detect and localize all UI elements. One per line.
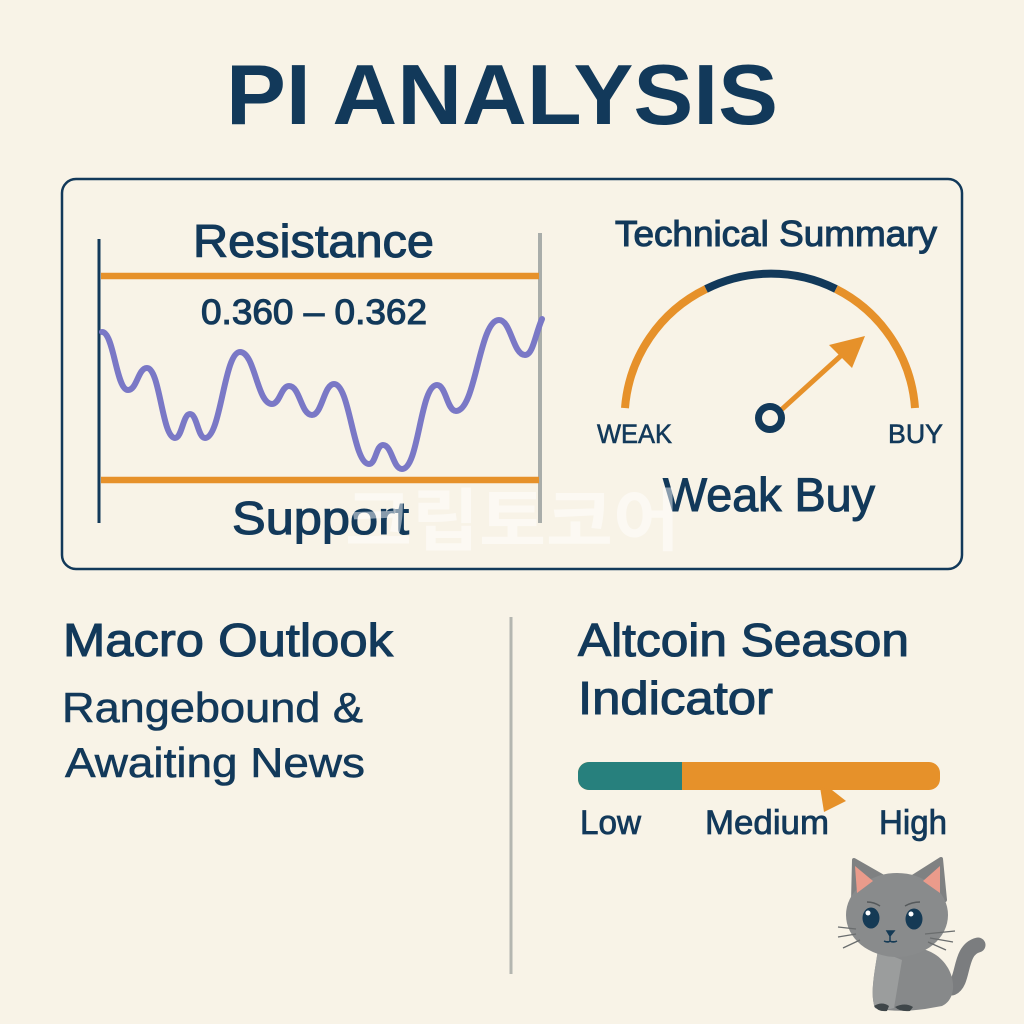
bar label: high: High	[879, 804, 947, 842]
gauge	[625, 274, 915, 430]
bar label: low: Low	[580, 804, 641, 842]
gauge label: buy: BUY	[888, 419, 943, 449]
panel: price and technical summary	[62, 179, 962, 569]
altcoin season heading: Altcoin Season	[578, 614, 909, 666]
gauge result: Weak Buy	[663, 468, 875, 521]
watermark: 크립토코어	[345, 484, 680, 560]
bar label: medium: Medium	[705, 804, 829, 842]
technical summary heading: Technical Summary	[615, 213, 937, 254]
altcoin season bar	[578, 762, 940, 812]
icon: gray kitten	[838, 859, 978, 1011]
altcoin season heading	[578, 614, 909, 724]
macro outlook text: Rangebound &	[62, 684, 363, 731]
support label: Support	[232, 492, 409, 544]
price range chart	[99, 233, 542, 523]
gauge label: weak: WEAK	[597, 419, 672, 449]
altcoin season heading: Indicator	[578, 672, 773, 724]
resistance range value: 0.360 – 0.362	[201, 293, 427, 332]
macro outlook text	[62, 684, 365, 786]
resistance label: Resistance	[193, 215, 434, 267]
macro outlook text: Awaiting News	[65, 739, 365, 786]
title: PI ANALYSIS	[226, 48, 778, 143]
macro outlook heading: Macro Outlook	[63, 614, 394, 666]
